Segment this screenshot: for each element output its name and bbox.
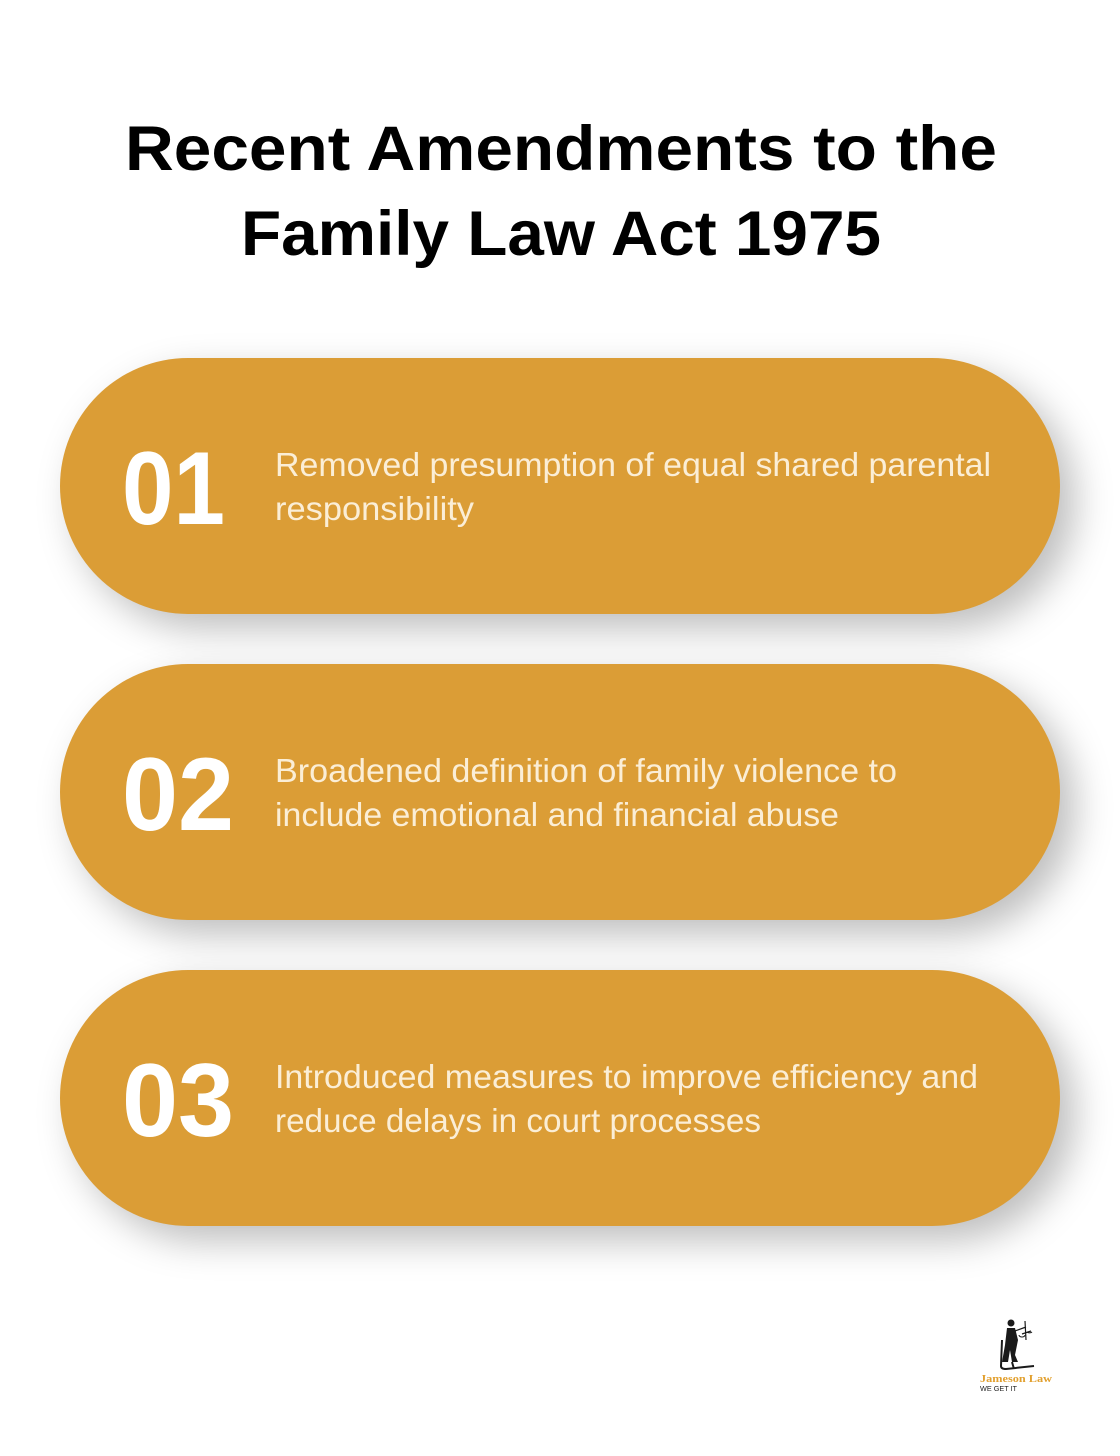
panel: amendment 03 background — [60, 970, 1060, 1226]
text: amendment 01 description: Removed presumption of equal shared parental — [275, 446, 991, 483]
title: Recent Amendments to the — [125, 114, 997, 184]
icon: lady justice — [1001, 1320, 1034, 1369]
amendment 02 content — [122, 737, 897, 853]
number 01: 01 — [122, 431, 225, 547]
text: amendment 02 description: include emotional and financial abuse — [275, 796, 839, 833]
text: amendment 02 description — [275, 752, 897, 833]
logo: Jameson Law — [980, 1320, 1052, 1393]
amendment 03 content — [122, 1043, 978, 1159]
text: amendment 03 description — [275, 1058, 978, 1139]
title: Family Law Act 1975 — [241, 199, 881, 269]
amendment 01 content — [122, 431, 991, 547]
text: amendment 02 description: Broadened definition of family violence to — [275, 752, 897, 789]
panel: amendment 01 background — [60, 358, 1060, 614]
text: amendment 03 description: Introduced measures to improve efficiency and — [275, 1058, 978, 1095]
title — [125, 114, 997, 269]
number 03: 03 — [122, 1043, 234, 1159]
text: amendment 03 description: reduce delays in court processes — [275, 1102, 761, 1139]
logo name: Jameson Law — [980, 1373, 1052, 1385]
text: amendment 01 description: responsibility — [275, 490, 475, 527]
number 02: 02 — [122, 737, 234, 853]
text: amendment 01 description — [275, 446, 991, 527]
panel: amendment 02 background — [60, 664, 1060, 920]
logo tagline: WE GET IT — [980, 1386, 1018, 1393]
